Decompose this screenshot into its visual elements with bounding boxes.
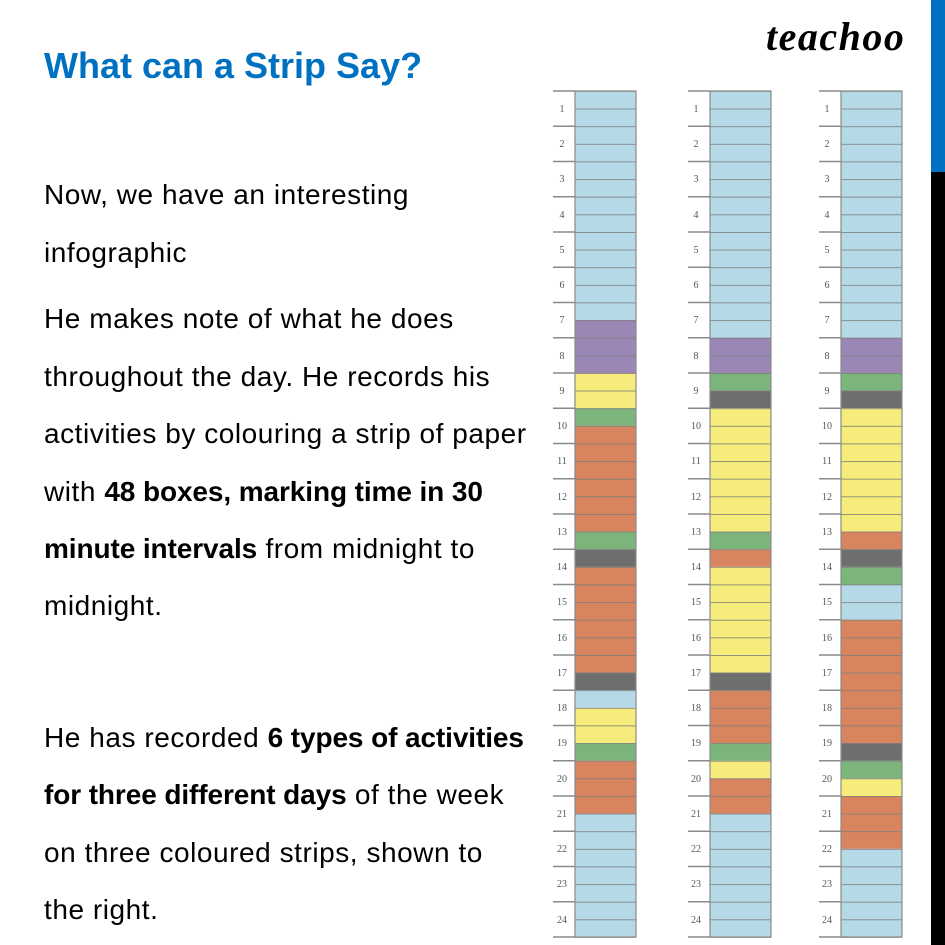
strip 2 bbox=[710, 90, 771, 938]
hour ticks and labels: 23 bbox=[557, 879, 567, 890]
text block: activities: for three different days of the week bbox=[44, 779, 504, 810]
hour ticks and labels: 13 bbox=[557, 527, 567, 538]
hour ticks and labels: 14 bbox=[557, 562, 567, 573]
text block: activities: the right. bbox=[44, 894, 158, 925]
hour ticks and labels bbox=[553, 91, 841, 937]
hour ticks and labels: 21 bbox=[557, 809, 567, 820]
text block: intro: He makes note of what he does bbox=[44, 303, 454, 334]
hour ticks and labels: 6 bbox=[560, 280, 564, 291]
text block: intro: midnight. bbox=[44, 590, 163, 621]
strip 1 bbox=[575, 90, 636, 938]
text block: activities: He has recorded 6 types of activities bbox=[44, 722, 524, 753]
title: What can a Strip Say? bbox=[44, 45, 422, 86]
text block: intro: minute intervals from midnight to bbox=[44, 533, 475, 564]
hour ticks and labels: 1 bbox=[560, 104, 564, 115]
hour ticks and labels: 18 bbox=[557, 703, 567, 714]
hour ticks and labels: 4 bbox=[560, 210, 564, 221]
hour ticks and labels: 22 bbox=[557, 844, 567, 855]
hour ticks and labels: 11 bbox=[557, 456, 567, 467]
text block: activities bbox=[44, 722, 524, 925]
hour ticks and labels: 16 bbox=[557, 633, 567, 644]
hour ticks and labels: 8 bbox=[560, 351, 564, 362]
text block: intro: throughout the day. He records his bbox=[44, 361, 490, 392]
hour ticks and labels: 24 bbox=[557, 915, 567, 926]
text block: intro: infographic bbox=[44, 237, 187, 268]
hour ticks and labels: 7 bbox=[560, 315, 564, 326]
hour ticks and labels: 19 bbox=[557, 738, 567, 749]
text block: intro: Now, we have an interesting bbox=[44, 179, 409, 210]
side bar: black bbox=[931, 172, 945, 945]
hour ticks and labels: 15 bbox=[557, 597, 567, 608]
hour ticks and labels: 2 bbox=[560, 139, 564, 150]
logo: teachoo: teachoo bbox=[766, 14, 905, 59]
hour ticks and labels: 5 bbox=[560, 245, 564, 256]
hour ticks and labels: 3 bbox=[560, 174, 564, 185]
text block: intro: activities by colouring a strip of paper bbox=[44, 418, 527, 449]
hour ticks and labels: 9 bbox=[560, 386, 564, 397]
side bar: blue bbox=[931, 0, 945, 172]
text block: intro bbox=[44, 179, 527, 621]
hour ticks and labels: 10 bbox=[557, 421, 567, 432]
hour ticks and labels: 20 bbox=[557, 774, 567, 785]
text block: intro: with 48 boxes, marking time in 30 bbox=[44, 476, 483, 507]
text block: activities: on three coloured strips, shown to bbox=[44, 837, 483, 868]
hour ticks and labels: 17 bbox=[557, 668, 567, 679]
strip 3 bbox=[841, 90, 902, 938]
hour ticks and labels: 12 bbox=[557, 492, 567, 503]
